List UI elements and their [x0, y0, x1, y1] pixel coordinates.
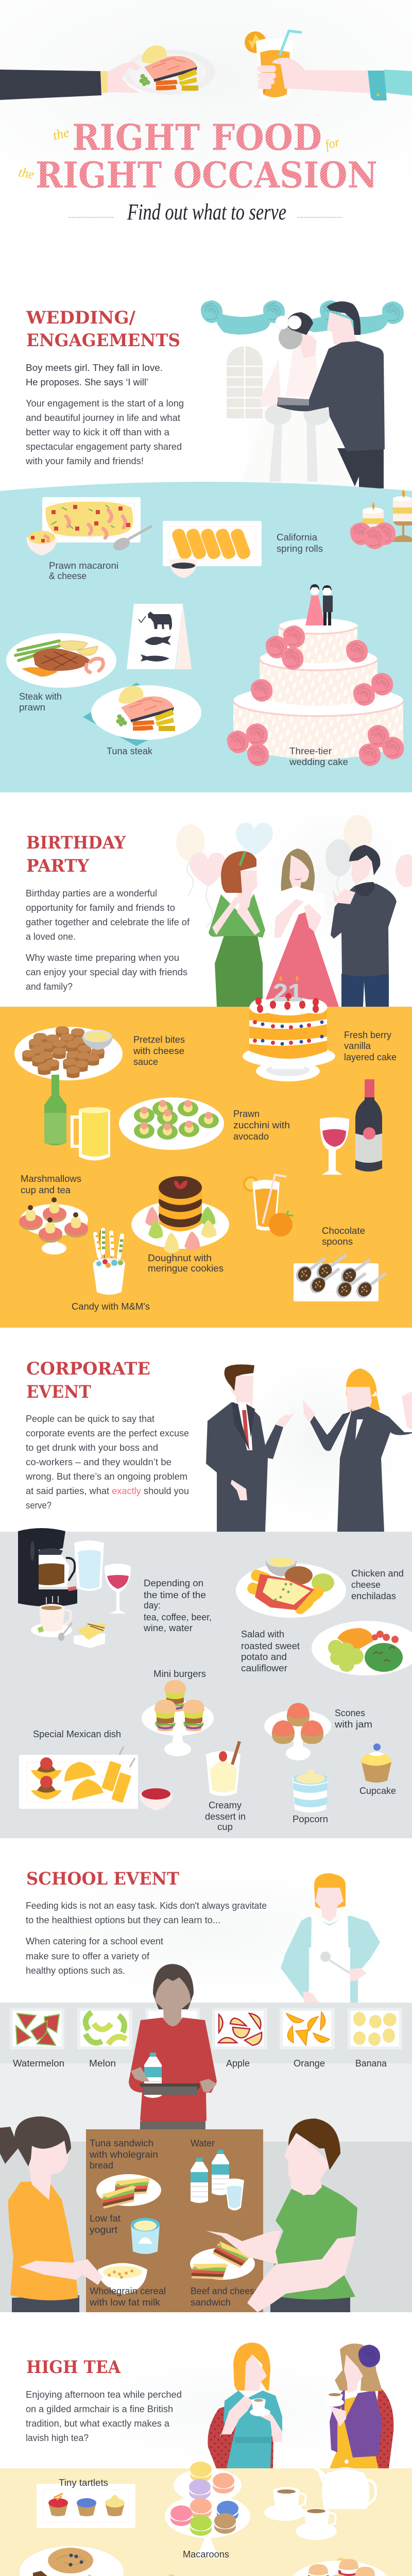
candy with M&Ms: Candy with M&M's	[72, 1301, 150, 1312]
fruit labels	[13, 2058, 387, 2069]
pretzel bites: with cheese	[133, 1046, 184, 1056]
creamy dessert in cup	[205, 1741, 246, 1832]
tiny tartlets	[37, 2478, 135, 2528]
title: the	[18, 164, 36, 182]
kid in green	[206, 2119, 357, 2312]
wine glass and bottle	[320, 1079, 382, 1175]
berry vanilla layered cake: 21	[273, 979, 303, 1007]
title	[18, 117, 377, 196]
depending label: tea, coffee, beer,	[144, 1612, 212, 1622]
berry vanilla layered cake	[243, 975, 397, 1081]
fruit: hidden card	[145, 2008, 200, 2049]
right cuff and sleeve	[368, 70, 412, 100]
low fat yogurt	[90, 2213, 160, 2254]
berry vanilla layered cake: layered cake	[344, 1052, 397, 1062]
cupcake: Cupcake	[359, 1786, 396, 1796]
creamy dessert in cup: dessert in	[205, 1811, 246, 1822]
fruit labels: Orange	[294, 2058, 325, 2069]
title: for	[323, 134, 341, 152]
fruit: banana	[348, 2008, 402, 2049]
creamy dessert in cup: cup	[217, 1822, 233, 1832]
fruit labels: Apple	[226, 2058, 250, 2069]
bride	[242, 312, 355, 482]
beef and cheese sandwich: sandwich	[191, 2297, 231, 2308]
birthday table	[0, 1007, 412, 1328]
panel: wedding / engagements	[0, 300, 412, 792]
tuna sandwich: bread	[90, 2160, 113, 2171]
chicken and cheese enchiladas: cheese	[351, 1580, 381, 1590]
title: RIGHT FOOD	[72, 117, 322, 159]
wedding text: better way to kick it off than with a	[26, 427, 170, 437]
kid in orange	[0, 2116, 103, 2312]
chocolate spoons: Chocolate	[322, 1226, 365, 1236]
cupcake	[359, 1743, 396, 1796]
man in sweater	[331, 845, 397, 1007]
school text: make sure to offer a variety of	[26, 1951, 150, 1961]
creamy dessert in cup: Creamy	[209, 1800, 242, 1810]
scones with jam	[264, 1703, 372, 1760]
panel: birthday party	[0, 815, 412, 1328]
corporate text: at said parties, what exactly should you	[26, 1486, 189, 1496]
birthday heading	[26, 833, 126, 876]
high tea table	[0, 2468, 412, 2576]
salad with roasted sweet potato and cauliflower: roasted sweet	[241, 1641, 300, 1651]
wedding text: Boy meets girl. They fall in love.	[26, 363, 163, 373]
tea cup and sugar box	[31, 1596, 106, 1648]
pretzel bites	[14, 1026, 185, 1080]
birthday text: Birthday parties are a wonderful	[26, 888, 157, 899]
salad with roasted sweet potato and cauliflower: cauliflower	[241, 1663, 287, 1673]
tiny tartlets: Tiny tartlets	[59, 2478, 108, 2488]
birthday heading: PARTY	[26, 856, 90, 876]
prawn macaroni: & cheese	[49, 571, 87, 581]
prawn macaroni: Prawn macaroni	[49, 561, 118, 571]
wedding text: and beautiful journey in life and what	[26, 413, 180, 423]
woman in green	[209, 851, 265, 1007]
businessman	[206, 1364, 295, 1532]
businesswoman	[303, 1368, 412, 1532]
low fat yogurt: Low fat	[90, 2213, 121, 2224]
candles and roses	[350, 489, 412, 549]
water bottles: Water	[191, 2138, 215, 2148]
macaroons	[165, 2462, 250, 2560]
high tea text	[26, 2389, 182, 2443]
chef woman	[281, 1873, 380, 2003]
doughnut with meringue cookies: Doughnut with	[148, 1253, 212, 1263]
steak with prawn: Steak with	[19, 691, 62, 702]
birthday text: and family?	[26, 981, 73, 992]
woman in purple	[325, 2344, 393, 2468]
scones with jam: with jam	[334, 1719, 372, 1730]
corporate heading	[26, 1359, 150, 1402]
depending label: day:	[144, 1600, 161, 1611]
fruit labels: Melon	[89, 2058, 116, 2069]
depending label: the time of the	[144, 1590, 206, 1600]
lunch table	[86, 2129, 263, 2312]
high tea text: on a gilded armchair is a fine British	[26, 2404, 173, 2414]
chicken and cheese enchiladas	[236, 1556, 404, 1618]
fruit labels: Watermelon	[13, 2058, 64, 2069]
tuna steak	[83, 683, 201, 756]
corporate heading: EVENT	[26, 1382, 91, 1402]
fruit: apple	[212, 2008, 267, 2049]
fruit band and floors	[0, 2003, 412, 2063]
birthday text: gather together and celebrate the life of	[26, 917, 190, 927]
birthday text: a loved one.	[26, 931, 76, 942]
three-tier wedding cake: wedding cake	[289, 757, 348, 767]
macaroons: Macaroons	[183, 2549, 229, 2560]
right arm and hand	[258, 58, 371, 93]
school heading: SCHOOL EVENT	[26, 1869, 179, 1889]
teapot and cups	[264, 2460, 376, 2540]
chocolate spoons: spoons	[322, 1236, 353, 1247]
pretzel bites: sauce	[133, 1057, 158, 1067]
corporate text: co-workers – and they wouldn’t be	[26, 1457, 171, 1467]
three-tier wedding cake: Three-tier	[289, 746, 332, 756]
menu card	[127, 604, 192, 669]
wholegrain cereal	[89, 2263, 166, 2308]
chocolate spoons	[293, 1226, 385, 1301]
marshmallows cup and tea: cup and tea	[21, 1185, 71, 1195]
wedding heading	[26, 308, 180, 351]
birthday heading: BIRTHDAY	[26, 833, 126, 853]
high tea heading: HIGH TEA	[26, 2357, 121, 2378]
chicken and cheese enchiladas: Chicken and	[351, 1568, 404, 1579]
wedding illustration	[201, 300, 404, 488]
corporate text: to get drunk with your boss and	[26, 1443, 158, 1453]
corporate text: People can be quick to say that	[26, 1414, 154, 1424]
fruit: watermelon	[10, 2008, 64, 2049]
prawn zucchini with avocado	[119, 1097, 290, 1150]
corporate heading: CORPORATE	[26, 1359, 150, 1379]
depending label: Depending on	[144, 1578, 203, 1588]
plate of salmon	[124, 45, 215, 95]
birthday text	[26, 888, 190, 992]
birthday text: opportunity for family and friends to	[26, 903, 175, 913]
california spring rolls	[163, 521, 323, 578]
groom	[277, 301, 385, 488]
scones with jam: Scones	[335, 1708, 365, 1718]
high tea text: lavish high tea?	[26, 2433, 89, 2443]
wedding text: Your engagement is the start of a long	[26, 398, 184, 409]
special mexican dish: Special Mexican dish	[33, 1729, 121, 1739]
berry vanilla layered cake: Fresh berry	[344, 1030, 391, 1040]
title: RIGHT OCCASION	[36, 155, 377, 196]
steak with prawn	[6, 633, 116, 713]
salad with roasted sweet potato and cauliflower: potato and	[241, 1652, 287, 1662]
tuna sandwich: with wholegrain	[89, 2149, 158, 2160]
california spring rolls: California	[277, 532, 318, 543]
panel: high tea	[0, 2343, 412, 2576]
beef and cheese sandwich: Beef and cheese	[191, 2286, 260, 2296]
california spring rolls: spring rolls	[277, 544, 323, 554]
woman in pink	[263, 849, 339, 1007]
wedding text: spectacular engagement party shared	[26, 442, 182, 452]
server boy	[129, 1964, 217, 2130]
panel: school event	[0, 1869, 412, 2312]
mini burgers: Mini burgers	[153, 1669, 206, 1679]
wholegrain cereal: with low fat milk	[89, 2297, 161, 2308]
scones with jam and cream	[286, 2557, 397, 2576]
prawn macaroni	[26, 497, 151, 581]
beef and cheese sandwich	[187, 2232, 260, 2308]
school text: to the healthiest options but they can learn to...	[26, 1915, 220, 1925]
tuna sandwich: Tuna sandwich	[90, 2138, 153, 2148]
pretzel bites: Pretzel bites	[133, 1035, 185, 1045]
chicken and cheese enchiladas: enchiladas	[351, 1591, 396, 1601]
wedding table	[0, 482, 412, 792]
school text: healthy options such as.	[26, 1965, 125, 1976]
school text: When catering for a school event	[26, 1936, 163, 1946]
marshmallows cup and tea: Marshmallows	[21, 1174, 81, 1184]
water bottles	[191, 2138, 244, 2210]
wholegrain cereal: Wholegrain cereal	[90, 2286, 166, 2296]
popcorn: Popcorn	[293, 1814, 328, 1824]
prawn zucchini with avocado: avocado	[233, 1131, 269, 1142]
birthday text: Why waste time preparing when you	[26, 953, 179, 963]
wedding heading: ENGAGEMENTS	[26, 330, 180, 351]
school text: Feeding kids is not an easy task. Kids don't always gravitate	[26, 1901, 267, 1911]
high tea text: Enjoying afternoon tea while perched	[26, 2389, 182, 2400]
green bottle and beer mug	[44, 1075, 110, 1160]
corporate text	[25, 1414, 189, 1511]
orange juice and orange	[243, 1175, 294, 1236]
candy with M&Ms	[72, 1230, 150, 1312]
left arm with suit sleeve	[0, 70, 108, 100]
subtitle: Find out what to serve	[127, 199, 286, 225]
corporate text: serve?	[26, 1500, 52, 1511]
window	[227, 346, 263, 418]
high tea text: tradition, but what exactly makes a	[26, 2418, 170, 2429]
title: the	[51, 125, 71, 143]
fruit labels: Banana	[355, 2058, 387, 2069]
popcorn	[293, 1769, 328, 1824]
fruit: orange	[280, 2008, 335, 2049]
woman in teal	[208, 2343, 282, 2468]
tuna sandwich	[89, 2138, 161, 2214]
depending label	[143, 1578, 212, 1633]
left hand	[108, 61, 141, 93]
berry vanilla layered cake: vanilla	[344, 1041, 371, 1051]
prawn zucchini with avocado: Prawn	[233, 1109, 260, 1119]
wedding heading: WEDDING/	[26, 308, 136, 328]
steak with prawn: prawn	[19, 702, 45, 713]
header illustration: hands with plate and juice	[0, 31, 412, 101]
mini burgers	[142, 1669, 214, 1756]
birthday text: can enjoy your special day with friends	[26, 967, 187, 977]
fruit: melon	[77, 2008, 132, 2049]
corporate text: wrong. But there’s an ongoing problem	[25, 1471, 187, 1482]
wedding text: He proposes. She says ‘I will’	[26, 377, 148, 387]
doughnut with meringue cookies	[131, 1176, 229, 1274]
corporate text: corporate events are the perfect excuse	[26, 1428, 189, 1438]
balloons	[176, 815, 412, 927]
wedding text: with your family and friends!	[25, 456, 144, 466]
prawn zucchini with avocado: zucchini with	[233, 1120, 290, 1130]
assortment of french pastries	[20, 2546, 227, 2576]
salad with roasted sweet potato and cauliflower	[241, 1621, 412, 1675]
school text	[26, 1901, 267, 1976]
special mexican dish	[19, 1729, 173, 1810]
wedding text	[25, 363, 184, 466]
panel: corporate event	[0, 1359, 412, 1838]
tuna steak: Tuna steak	[107, 746, 153, 756]
garland	[201, 300, 404, 334]
three-tier wedding cake	[227, 584, 404, 767]
doughnut with meringue cookies: meringue cookies	[148, 1263, 224, 1274]
salad with roasted sweet potato and cauliflower: Salad with	[241, 1629, 284, 1639]
marshmallows cup and tea	[19, 1174, 88, 1255]
depending label: wine, water	[143, 1623, 193, 1633]
glass of orange juice	[245, 31, 302, 101]
coffee machine and drinks	[18, 1528, 131, 1614]
corporate table	[0, 1532, 412, 1838]
low fat yogurt: yogurt	[90, 2225, 117, 2235]
